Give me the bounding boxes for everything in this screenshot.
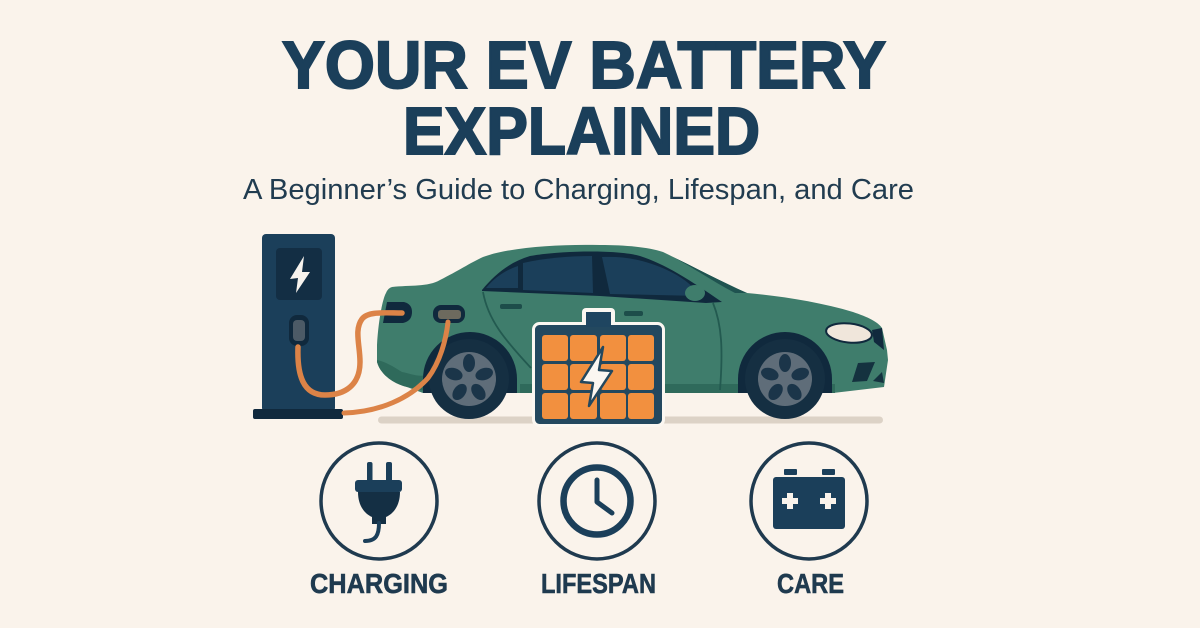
charge port: [433, 305, 465, 323]
battery terminal: [582, 308, 615, 328]
battery casing: [534, 324, 664, 426]
label: charging: CHARGING: [310, 568, 448, 599]
tail light: [383, 302, 412, 323]
charger screen: [276, 248, 322, 300]
label: care: CARE: [777, 568, 844, 599]
subtitle: A Beginner’s Guide to Charging, Lifespan, and Care: [243, 174, 914, 206]
icon: battery lightning bolt: [581, 347, 612, 406]
front window: [602, 257, 700, 296]
lower body shade: [377, 360, 835, 393]
charging station: [253, 234, 343, 419]
rear wheel: [423, 332, 517, 419]
charger body: [262, 234, 335, 412]
car body: [377, 245, 888, 393]
battery pack: [534, 308, 664, 426]
car: [377, 245, 888, 419]
ground shadow: [378, 416, 883, 424]
cable holster: [289, 315, 309, 346]
rear quarter window: [486, 266, 518, 288]
title: EXPLAINED: [403, 94, 760, 169]
rear window: [523, 256, 593, 293]
charging cables: [298, 313, 448, 413]
icon: charging plug: [321, 443, 437, 559]
door lines: [483, 292, 722, 390]
front air vent: [852, 362, 884, 383]
A-pillar shade: [663, 252, 747, 293]
headlight: [825, 321, 873, 345]
icon: screen lightning bolt: [290, 256, 310, 293]
charger base: [253, 409, 343, 419]
door handles: [500, 304, 522, 309]
battery cells: [542, 335, 654, 419]
side mirror: [685, 285, 705, 301]
front wheel: [738, 332, 832, 419]
icon: lifespan clock: [539, 443, 655, 559]
title: YOUR EV BATTERY: [282, 28, 886, 103]
window surround: [482, 252, 722, 303]
label: lifespan: LIFESPAN: [541, 568, 656, 599]
title: [282, 28, 886, 169]
icon: care battery: [751, 443, 867, 559]
